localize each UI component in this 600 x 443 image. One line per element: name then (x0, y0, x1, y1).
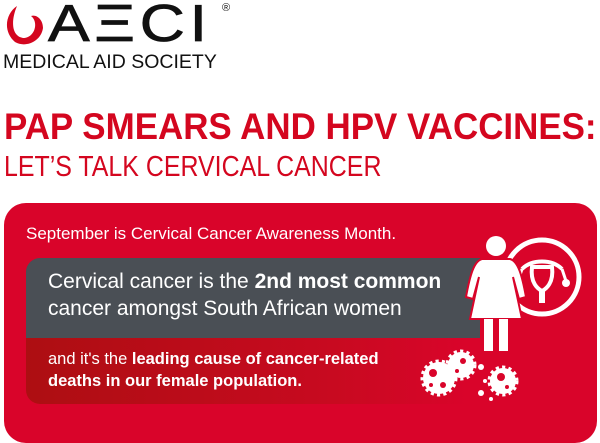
subtitle: LET’S TALK CERVICAL CANCER (4, 151, 381, 183)
text: september: September is Cervical Cancer Awareness Month. (26, 224, 396, 243)
icon: cancer cells (420, 350, 518, 401)
logo (3, 0, 230, 73)
icon: logo flame (6, 6, 43, 44)
callout: leading cause: and it's the leading cause of cancer-related (48, 350, 379, 368)
callout: leading cause: deaths in our female population. (48, 372, 302, 390)
callout: 2nd most common: cancer amongst South African women (48, 297, 402, 320)
callout: leading cause (26, 338, 466, 404)
callout: 2nd most common: Cervical cancer is the 2nd most common (48, 270, 441, 293)
callout: 2nd most common (26, 258, 480, 338)
logo subtitle: MEDICAL AID SOCIETY (3, 51, 217, 73)
logo: ® (222, 2, 230, 14)
icon: uterus circle (507, 238, 582, 316)
icon: woman (464, 236, 525, 351)
panel: awareness (4, 203, 597, 443)
title: PAP SMEARS AND HPV VACCINES: (4, 106, 597, 147)
